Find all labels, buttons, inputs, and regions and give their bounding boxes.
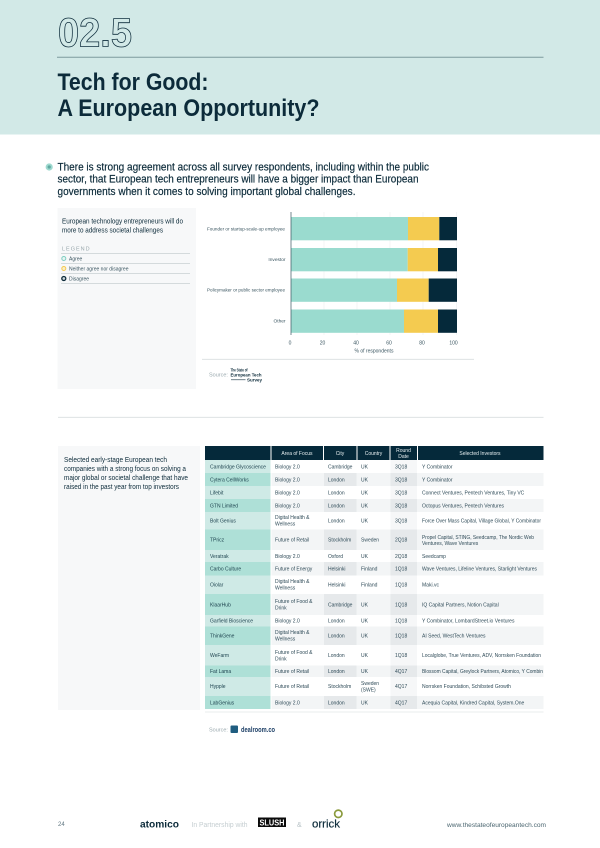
survey question: more to address societal challenges [62,228,163,234]
row: Garfield Bioscience: Garfield Bioscience [210,618,253,624]
row: Garfield Bioscience: London [328,618,345,624]
row: WeFarm: UK [361,653,369,659]
table header: Date [398,454,409,460]
logo: slush: SLUSH [260,818,285,828]
x axis labels: 20 [320,340,325,346]
row: Fat Lama: UK [361,669,369,675]
title: Tech for Good: [58,69,208,96]
row: KlaarHub [205,594,544,615]
source: survey logo: Source: [209,372,228,378]
footer [58,810,546,830]
row: KlaarHub: UK [361,602,369,608]
row: KlaarHub: Cambridge [328,602,353,608]
row: Bolt Genius: London [328,518,345,524]
row: Oiolar: Helsinki [328,582,346,588]
row: WeFarm: Localglobe, True Ventures, ADV, Norrsken Foundation [422,653,541,659]
row: Fat Lama [205,666,544,677]
row: Hypple: Sweden [361,681,379,687]
row: Fat Lama: Future of Retail [275,669,309,675]
row: Cambridge Glycoscience: UK [361,464,369,470]
row: GTN Limited: London [328,503,345,509]
row: GTN Limited: Octopus Ventures, Pentech Ventures [422,503,504,509]
row: WeFarm: London [328,653,345,659]
row: WeFarm: Drink [275,656,287,662]
panel: table description: Selected early-stage European tech [64,457,167,464]
row: Lifebit: UK [361,490,369,496]
row: Carbo Culture: Carbo Culture [210,566,241,572]
row: LabGenius [205,696,544,709]
row: ThinkGene: Digital Health & [275,630,310,636]
row: Fat Lama: Blossom Capital, Greylock Partners, Atomico, Y Combin [422,669,543,675]
row: Garfield Bioscience: UK [361,618,369,624]
row: Veratrak: 2Q18 [395,554,407,560]
logo: atomico: atomico [140,818,179,830]
legend: Disagree [69,276,89,282]
row: Garfield Bioscience: Y Combinator, LombardStreet.io Ventures [422,618,515,624]
row: Carbo Culture [205,562,544,576]
row: Cytera CellWorks: Y Combinator [422,477,453,483]
x axis labels [289,340,458,354]
row: TPricz: TPricz [210,538,225,544]
row: Veratrak: Oxford [328,554,343,560]
intro text [58,162,430,198]
row: Fat Lama: London [328,669,345,675]
row: Hypple: Norrsken Foundation, Schibsted Growth [422,684,511,690]
row: ThinkGene [205,626,544,645]
row: GTN Limited [205,499,544,512]
row: Fat Lama: 4Q17 [395,669,407,675]
row: Garfield Bioscience: Biology 2.0 [275,618,300,624]
row: LabGenius: UK [361,700,369,706]
stacked bar chart [207,212,458,354]
row: KlaarHub: 1Q18 [395,602,407,608]
row: Cambridge Glycoscience: Cambridge Glycoscience [210,464,266,470]
row: TPricz: Ventures, Wave Ventures [422,541,479,547]
row: ThinkGene: AI Seed, WestTech Ventures [422,634,486,640]
page number: 24 [58,822,65,828]
source: survey logo: European Tech [230,372,262,378]
row: TPricz: 2Q18 [395,538,407,544]
row: Lifebit: Lifebit [210,490,224,496]
row: Cytera CellWorks: Biology 2.0 [275,477,300,483]
source: survey logo: Survey [247,378,262,384]
row: Cytera CellWorks: UK [361,477,369,483]
source: survey logo: The State of [230,368,248,374]
source: survey logo [209,368,262,384]
panel: table description [58,446,200,710]
row: TPricz: Sweden [361,538,379,544]
panel: survey description and legend [58,208,196,389]
intro text: sector, that European tech entrepreneurs will have a bigger impact than European [58,174,418,186]
row: Carbo Culture: 1Q18 [395,566,407,572]
row: LabGenius: London [328,700,345,706]
row: GTN Limited: 3Q18 [395,503,407,509]
row: ThinkGene: UK [361,634,369,640]
row: Carbo Culture: Helsinki [328,566,346,572]
row: Lifebit: 3Q18 [395,490,407,496]
row: KlaarHub: Drink [275,606,287,612]
row: Lifebit [205,486,525,499]
section number: 02.5 [58,10,132,56]
bullet icon [46,163,53,171]
row: Oiolar: Maki.vc [422,582,439,588]
website: www.thestateofeuropeantech.com [446,823,546,829]
row: TPricz [205,530,544,550]
row: Cytera CellWorks: 3Q18 [395,477,407,483]
row: Cambridge Glycoscience: Y Combinator [422,464,453,470]
table header [205,446,544,460]
table: early-stage companies [205,446,544,709]
row: KlaarHub: KlaarHub [210,602,231,608]
row: KlaarHub: Future of Food & [275,599,313,605]
row: Bolt Genius: 3Q18 [395,518,407,524]
bar: investor [268,248,457,271]
intro text: governments when it comes to solving important global challenges. [58,186,356,198]
row: GTN Limited: GTN Limited [210,503,238,509]
row: Cytera CellWorks [205,473,544,486]
header band [0,0,600,134]
bar: investor: Investor [268,257,286,263]
source: dealroom logo: dealroom.co [241,727,275,734]
x axis labels: % of respondents [355,348,394,354]
x axis labels: 80 [419,340,425,346]
row: Veratrak: Biology 2.0 [275,554,300,560]
row: GTN Limited: Biology 2.0 [275,503,300,509]
panel: table description: companies with a strong focus on solving a [64,466,186,473]
row: Lifebit: London [328,490,345,496]
row: Hypple: Stockholm [328,684,351,690]
survey question: European technology entrepreneurs will do [62,218,183,226]
table header: City [336,451,345,457]
row: LabGenius: Biology 2.0 [275,700,300,706]
row: TPricz: Stockholm [328,538,351,544]
row: ThinkGene: London [328,634,345,640]
row: Oiolar: 1Q18 [395,582,407,588]
row: Hypple: Future of Retail [275,684,309,690]
row: Garfield Bioscience [205,615,515,626]
bar: founder: Founder or startup-scale-up employee [207,226,285,232]
row: Oiolar [205,576,439,594]
row: Hypple: 4Q17 [395,684,407,690]
row: TPricz: Propel Capital, STING, Seedcamp, The Nordic Web [422,535,534,541]
table header: Country [365,451,383,457]
row: Cambridge Glycoscience [205,460,453,473]
row: Bolt Genius: UK [361,518,369,524]
panel: table description: major global or societal challenge that have [64,475,188,482]
legend: LEGEND [62,246,91,252]
row: Veratrak [205,550,446,562]
row: LabGenius: Acequia Capital, Kindred Capital, System.One [422,700,524,706]
row: Cambridge Glycoscience: 3Q18 [395,464,407,470]
row: WeFarm: Future of Food & [275,650,313,656]
row: Bolt Genius [205,512,541,530]
row: Carbo Culture: Wave Ventures, Lifeline Ventures, Starlight Ventures [422,566,537,572]
title [58,69,320,122]
legend: Agree [69,256,83,262]
row: Bolt Genius: Bolt Genius [210,518,236,524]
bar: founder [207,217,457,240]
row: ThinkGene: 1Q18 [395,634,407,640]
partnership text: In Partnership with [192,822,248,829]
row: WeFarm [205,645,541,666]
row: Bolt Genius: Digital Health & [275,515,310,521]
row: Lifebit: Connect Ventures, Pentech Ventures, Tiny VC [422,490,525,496]
table header: Round [396,448,411,454]
row: Hypple: (SWE) [361,688,376,694]
row: Oiolar: Digital Health & [275,579,310,585]
ampersand: & [297,822,302,829]
table header: Selected Investors [459,451,501,457]
row: ThinkGene: ThinkGene [210,633,235,639]
row: Veratrak: Veratrak [210,554,229,560]
row: Cytera CellWorks: London [328,477,345,483]
row: Veratrak: UK [361,554,369,560]
row: Cambridge Glycoscience: Cambridge [328,464,353,470]
bar: other [274,310,457,333]
row: Bolt Genius: Force Over Mass Capital, Village Global, Y Combinator [422,518,541,524]
legend [61,246,190,284]
logo: orrick [312,810,342,830]
row: Cytera CellWorks: Cytera CellWorks [210,477,249,483]
row: Bolt Genius: Wellness [275,522,296,528]
row: Veratrak: Seedcamp [422,554,446,560]
intro text: There is strong agreement across all survey respondents, including within the public [58,162,430,174]
bar: other: Other [274,318,286,324]
row: Fat Lama: Fat Lama [210,669,231,675]
row: Oiolar: Finland [361,582,378,588]
row: Carbo Culture: Finland [361,566,378,572]
row: Hypple [205,677,511,696]
row: TPricz: Future of Retail [275,538,309,544]
row: Oiolar: Wellness [275,586,296,592]
row: Garfield Bioscience: 1Q18 [395,618,407,624]
row: GTN Limited: UK [361,503,369,509]
bar: policymaker [207,278,457,302]
x axis labels: 100 [449,340,458,346]
title: A European Opportunity? [58,95,320,122]
row: Hypple: Hypple [210,684,226,690]
row: WeFarm: WeFarm [210,653,229,659]
logo: orrick: orrick [312,818,341,830]
legend: Neither agree nor disagree [69,266,129,272]
x axis labels: 0 [289,340,292,346]
bar: policymaker: Policymaker or public sector employee [207,288,285,294]
x axis labels: 40 [353,340,359,346]
source: dealroom logo [209,726,275,734]
row: Carbo Culture: Future of Energy [275,566,313,572]
row: WeFarm: 1Q18 [395,653,407,659]
row: ThinkGene: Wellness [275,636,296,642]
row: KlaarHub: IQ Capital Partners, Notion Capital [422,602,499,608]
survey question [62,218,183,234]
panel: table description: raised in the past year from top investors [64,484,179,491]
source: dealroom logo: Source: [209,728,228,734]
row: LabGenius: 4Q17 [395,700,407,706]
row: Oiolar: Oiolar [210,582,224,588]
row: Lifebit: Biology 2.0 [275,490,300,496]
table header: Area of Focus [281,451,313,457]
row: Cambridge Glycoscience: Biology 2.0 [275,464,300,470]
x axis labels: 60 [386,340,392,346]
row: LabGenius: LabGenius [210,700,235,706]
